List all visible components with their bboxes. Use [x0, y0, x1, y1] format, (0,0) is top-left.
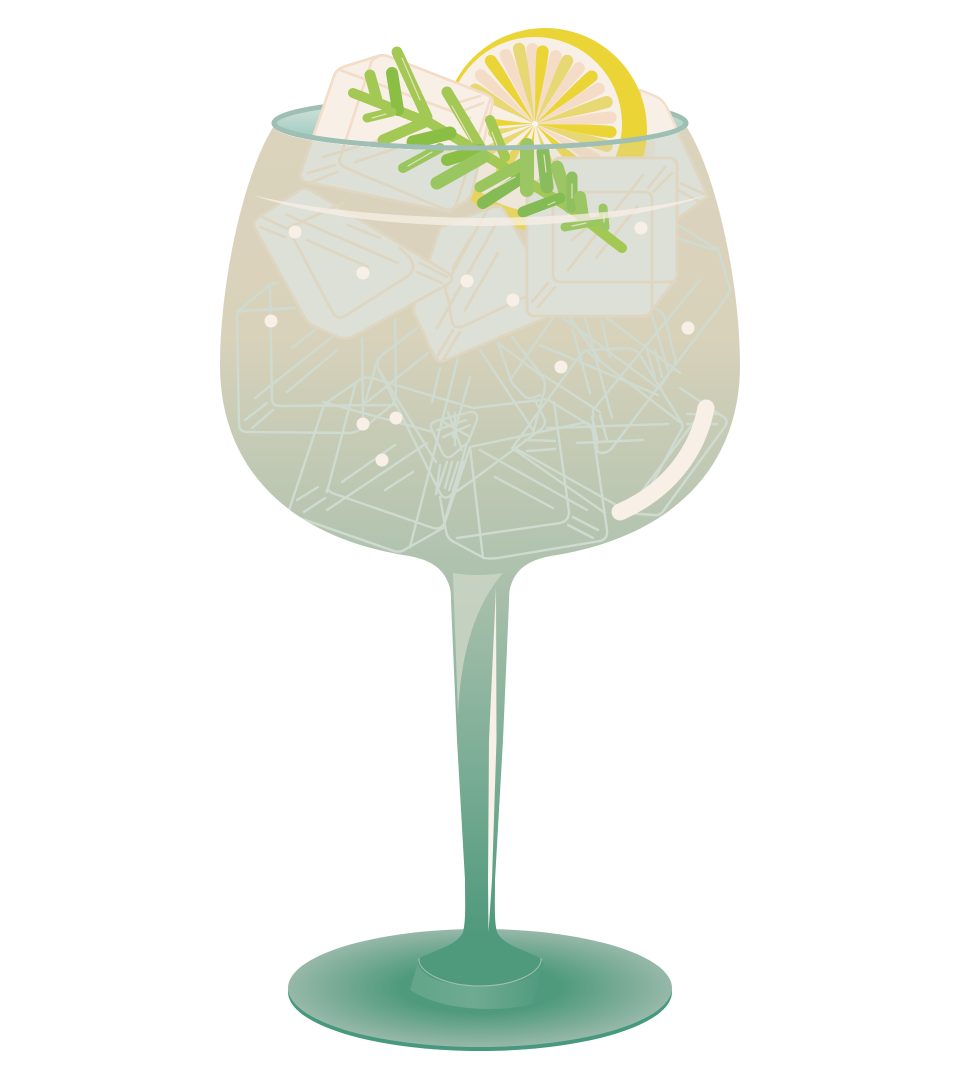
stem highlight: [453, 573, 503, 715]
rim front edge: [274, 123, 686, 148]
glass reflection: [620, 408, 706, 512]
leaves: [370, 75, 377, 100]
back ice cube: [638, 88, 678, 135]
foot cup outline: [419, 958, 541, 986]
foot plinth: [410, 962, 544, 1009]
lemon flesh: [448, 37, 622, 211]
ice cubes inside glass: [256, 140, 678, 362]
foot edge: [288, 933, 672, 1051]
tall centre ice cube: [365, 328, 545, 547]
rim opening: [274, 98, 686, 148]
lemon tint inside glass: [446, 140, 655, 230]
lemon centre: [532, 121, 538, 127]
lemon peel: [443, 28, 647, 232]
leaf highlights: [372, 58, 604, 226]
upper right ice cube: [540, 215, 730, 453]
glass body and stem: [220, 126, 740, 986]
lower centre ice cube: [440, 399, 607, 558]
foot surface: [288, 929, 672, 1047]
lemon segments: [467, 42, 617, 180]
back ice cube below rim: [644, 132, 706, 216]
submerged ice cubes: [237, 215, 730, 558]
central tilted ice cube: [480, 318, 600, 433]
liquid surface highlight: [252, 195, 708, 226]
small centre ice cube: [431, 412, 477, 457]
stem slit: [488, 587, 496, 932]
rosemary sprig: [353, 52, 622, 248]
bubbles: [264, 222, 694, 466]
left ice cube: [237, 283, 396, 433]
ice cubes above rim: [312, 54, 494, 146]
glass foot: [288, 929, 672, 1051]
right ice cube: [513, 318, 727, 515]
main stem: [353, 93, 622, 248]
lower left ice cube: [288, 377, 473, 552]
lemon slice: [443, 28, 647, 232]
